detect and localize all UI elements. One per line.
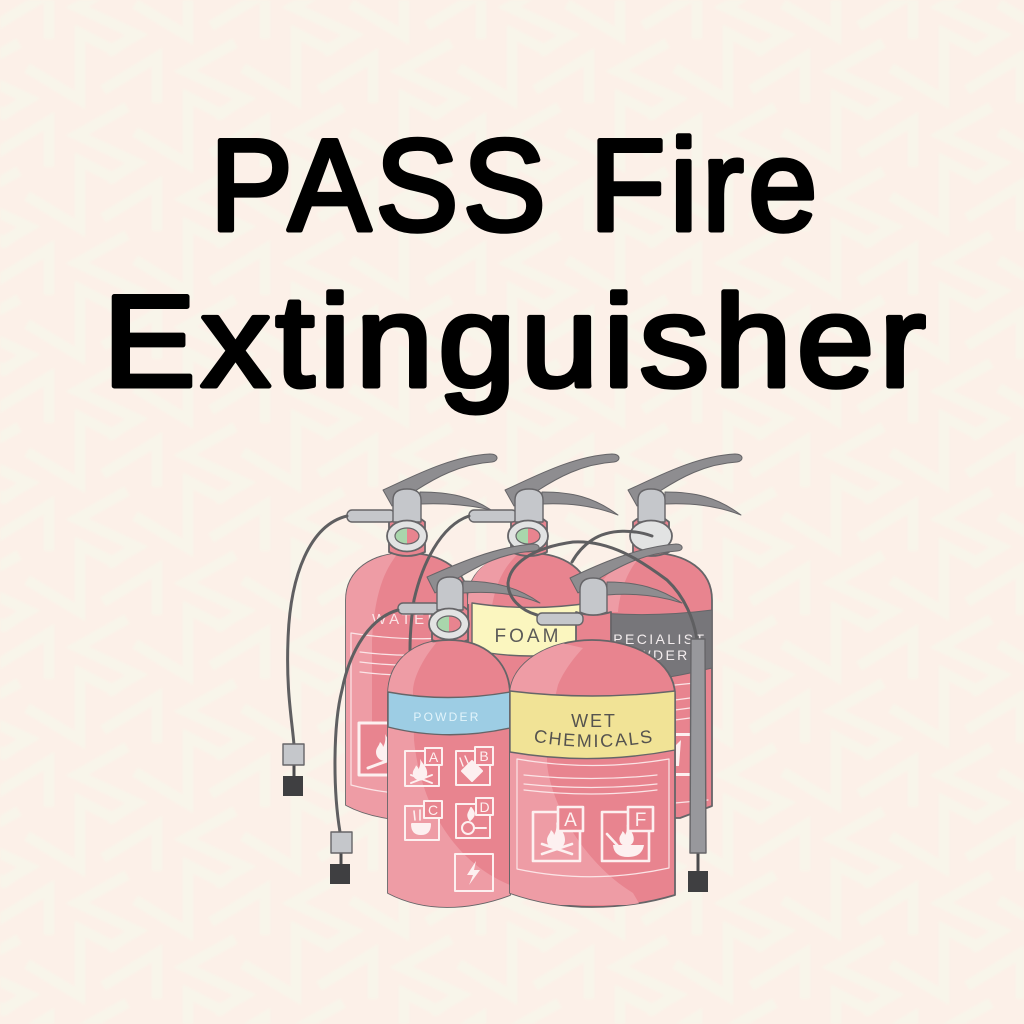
water levers [383, 454, 497, 510]
icon: class D [456, 798, 493, 838]
wet discharge bar [537, 613, 583, 625]
wet hose [508, 542, 697, 640]
illustration: group of five fire extinguishers [282, 454, 742, 908]
foam pressure gauge [508, 520, 548, 552]
extinguisher: specialist powder [572, 454, 742, 818]
water valve [393, 489, 421, 522]
icon: class D: D [479, 799, 490, 815]
title: PASS Fire [210, 112, 822, 258]
specialist label: SPECIALIST [602, 631, 706, 647]
powder valve [437, 577, 463, 610]
powder hose [335, 610, 398, 832]
powder icons [405, 747, 493, 891]
wet class F icon [602, 807, 653, 861]
extinguisher: powder [330, 544, 540, 910]
specialist icon fragment [676, 733, 692, 776]
foam levers [505, 454, 619, 515]
water collar [389, 519, 425, 556]
title: Extinguisher [103, 268, 931, 414]
water hose nozzle [283, 744, 304, 796]
icon: class A [405, 748, 442, 786]
foam collar [511, 519, 547, 556]
specialist band [590, 610, 712, 680]
foam label: FOAM [495, 626, 561, 647]
specialist label lines [675, 682, 708, 803]
water label lines [351, 633, 463, 794]
foam valve [515, 489, 543, 522]
powder levers [427, 544, 540, 603]
wet body [505, 630, 675, 907]
specialist valve [638, 489, 665, 522]
wet label: CHEMICALS [535, 730, 652, 747]
specialist label [602, 631, 706, 663]
icon: class C [405, 801, 442, 840]
powder discharge bar [398, 603, 440, 614]
powder body [380, 630, 510, 910]
specialist label: POWDER [612, 647, 690, 663]
icon: class A: A [429, 749, 439, 765]
water hose [288, 516, 347, 745]
foam body [468, 553, 590, 806]
powder hose nozzle [330, 832, 352, 884]
wet label: WET [571, 711, 617, 731]
icon: class B [456, 747, 493, 785]
wet collar [576, 612, 611, 646]
water pressure gauge [387, 520, 427, 552]
wet band [510, 691, 675, 759]
specialist gauge [630, 520, 672, 552]
title [103, 112, 931, 414]
extinguisher: water [283, 454, 497, 830]
powder pressure gauge [429, 608, 469, 640]
wet levers [570, 544, 682, 603]
foam band [472, 603, 590, 656]
wet hose nozzle [688, 639, 708, 892]
wet label panel lines [517, 759, 669, 877]
wet label [535, 711, 652, 747]
wet class F icon: F [635, 810, 646, 831]
specialist body [590, 553, 712, 818]
foam hose [410, 516, 469, 650]
specialist collar [633, 519, 669, 556]
water discharge bar [347, 510, 395, 522]
powder label: POWDER [413, 710, 481, 724]
specialist hose [572, 531, 652, 562]
icon: electrical bolt [455, 854, 493, 891]
powder band [388, 692, 510, 735]
specialist levers [628, 454, 742, 515]
powder collar [432, 607, 468, 644]
water class A icon [359, 723, 399, 775]
wet class A icon [533, 807, 583, 861]
extinguisher: foam [410, 454, 619, 806]
water body [340, 550, 468, 830]
wet class A icon: A [564, 810, 577, 831]
icon: class B: B [479, 748, 489, 764]
water label: WATER [372, 611, 442, 628]
foam discharge bar [469, 510, 517, 522]
extinguisher: wet chemicals [506, 540, 708, 908]
wet valve [580, 578, 607, 615]
icon: class C: C [428, 802, 438, 818]
